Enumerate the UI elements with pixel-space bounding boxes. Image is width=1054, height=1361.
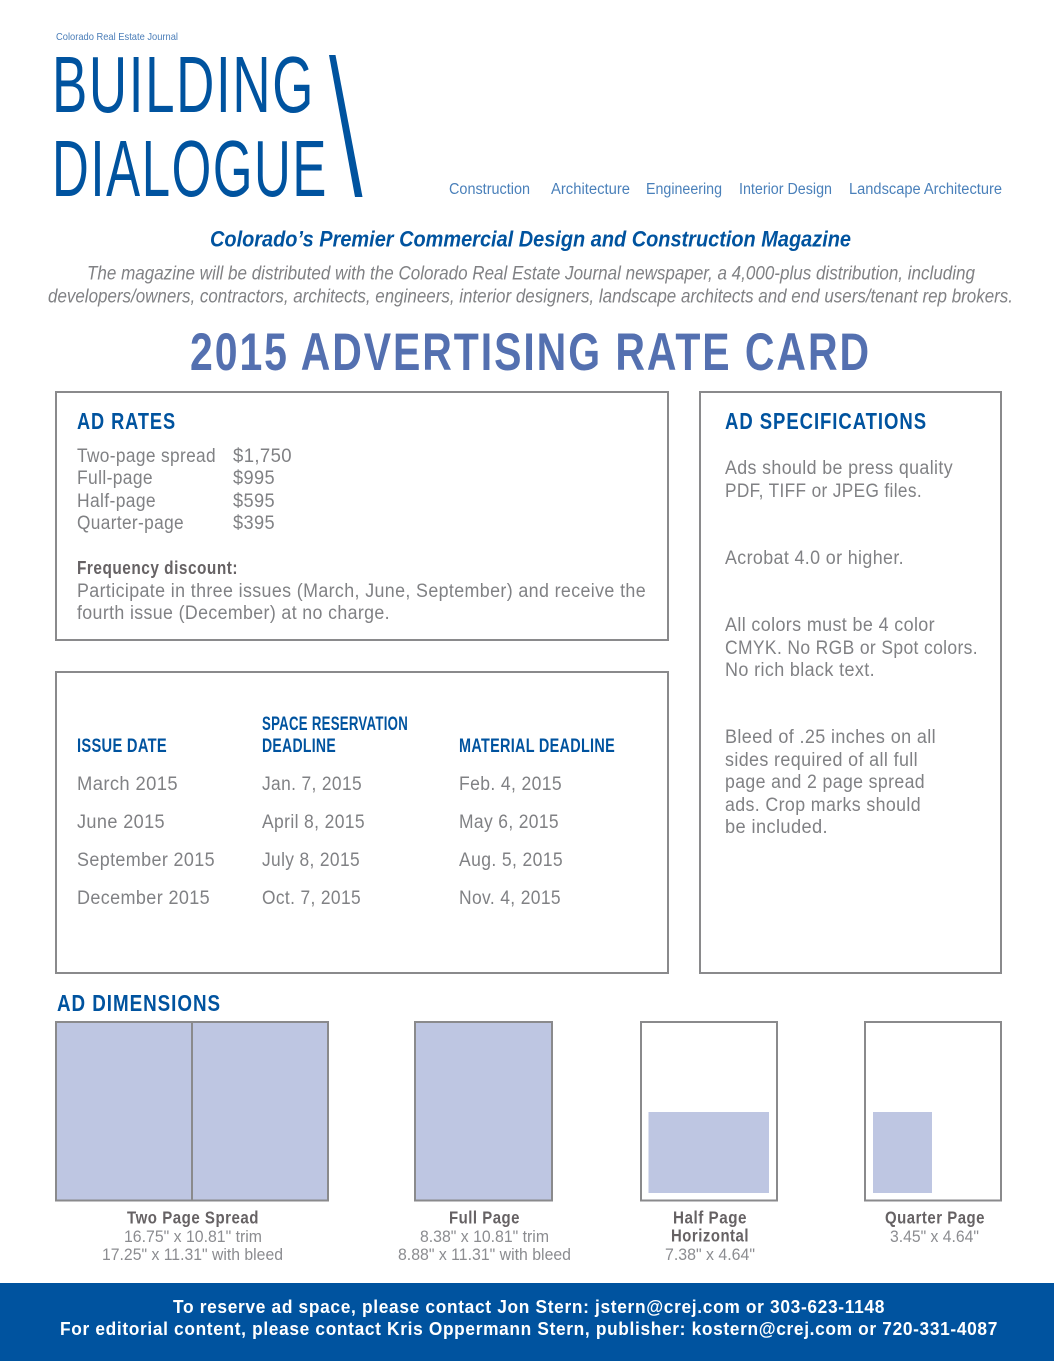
row: March: March 2015 (77, 774, 178, 795)
spec: file formats (725, 458, 953, 502)
rate list: Two-page spread (77, 446, 216, 467)
spec: colors: All colors must be 4 color (725, 615, 935, 636)
spec: colors: CMYK. No RGB or Spot colors. (725, 638, 978, 659)
spec: acrobat version: Acrobat 4.0 or higher. (725, 548, 904, 569)
diagram: quarter page (865, 1022, 1001, 1246)
category navigation: Architecture (551, 181, 630, 198)
frequency discount: Participate in three issues (March, June, September) and receive the (77, 581, 646, 602)
row: March: Jan. 7, 2015 (262, 774, 362, 795)
spec: bleed: be included. (725, 817, 828, 838)
ad rates heading: AD RATES (77, 408, 176, 434)
spec: colors (725, 615, 978, 681)
row: June (77, 812, 559, 833)
rate list (77, 446, 292, 534)
table headers: MATERIAL DEADLINE (459, 735, 615, 757)
panel: ad rates (56, 392, 668, 640)
spec: bleed: sides required of all full (725, 750, 918, 771)
diagram: half page horizontal: Horizontal (671, 1226, 749, 1246)
rate list: Full-page (77, 468, 153, 489)
row: September (77, 850, 563, 871)
spec: bleed: page and 2 page spread (725, 772, 925, 793)
spec: file formats: Ads should be press quality (725, 458, 953, 479)
row: March: Feb. 4, 2015 (459, 774, 562, 795)
rate list: $1,750 (233, 446, 292, 467)
category navigation (449, 181, 1002, 198)
panel: deadlines table (56, 672, 668, 973)
diagram: full page: 8.38" x 10.81" trim (420, 1228, 549, 1246)
row: September: Aug. 5, 2015 (459, 850, 563, 871)
category navigation: Engineering (646, 181, 722, 198)
footer contact band (0, 1283, 1054, 1361)
frequency discount: fourth issue (December) at no charge. (77, 603, 390, 624)
footer contact band: To reserve ad space, please contact Jon Stern: jstern@crej.com or 303-623-1148 (173, 1296, 885, 1317)
masthead (52, 31, 1002, 213)
rate list: $395 (233, 513, 275, 534)
rate list: Quarter-page (77, 513, 184, 534)
row: December: December 2015 (77, 888, 210, 909)
row: June: April 8, 2015 (262, 812, 365, 833)
spec: colors: No rich black text. (725, 660, 875, 681)
category navigation: Interior Design (739, 181, 832, 198)
row: June: June 2015 (77, 812, 165, 833)
logo: Building Dialogue (52, 40, 362, 213)
spec: bleed: Bleed of .25 inches on all (725, 727, 936, 748)
diagram: half page horizontal: 7.38" x 4.64" (665, 1246, 755, 1264)
diagram: quarter page: 3.45" x 4.64" (890, 1228, 979, 1246)
row: September: July 8, 2015 (262, 850, 360, 871)
diagram: quarter page: Quarter Page (885, 1208, 985, 1228)
diagram: half page horizontal (641, 1022, 777, 1264)
spec: file formats: PDF, TIFF or JPEG files. (725, 481, 922, 502)
diagram: full page: Full Page (449, 1208, 520, 1228)
logo: Building Dialogue: BUILDING (52, 40, 315, 129)
footer contact band: For editorial content, please contact Kris Oppermann Stern, publisher: kostern@crej.com or 720-331-4087 (60, 1318, 998, 1339)
specifications heading: AD SPECIFICATIONS (725, 408, 927, 434)
diagram: two page spread (56, 1022, 328, 1264)
tagline: Colorado’s Premier Commercial Design and Construction Magazine (210, 226, 851, 252)
table headers: ISSUE DATE (77, 735, 167, 757)
diagram: half page horizontal: Half Page (673, 1208, 747, 1228)
table headers: DEADLINE (262, 735, 336, 757)
frequency discount (77, 558, 646, 624)
logo: Building Dialogue: DIALOGUE (52, 124, 328, 213)
rate list: $995 (233, 468, 275, 489)
ad dimensions heading: AD DIMENSIONS (57, 990, 221, 1016)
row: June: May 6, 2015 (459, 812, 559, 833)
spec: bleed (725, 727, 936, 838)
publisher name: Colorado Real Estate Journal (56, 31, 178, 43)
spec: bleed: ads. Crop marks should (725, 795, 921, 816)
table headers (77, 713, 615, 757)
row: September: September 2015 (77, 850, 215, 871)
table headers: SPACE RESERVATION (262, 713, 408, 735)
diagram: full page: 8.88" x 11.31" with bleed (398, 1246, 571, 1264)
category navigation: Landscape Architecture (849, 181, 1002, 198)
row: March (77, 774, 562, 795)
intro paragraph: The magazine will be distributed with the Colorado Real Estate Journal newspaper, a 4,000-plus distribution, including (87, 264, 975, 284)
rate list: $595 (233, 491, 275, 512)
diagram: two page spread: 16.75" x 10.81" trim (124, 1228, 262, 1246)
main heading: 2015 ADVERTISING RATE CARD (190, 323, 871, 382)
rate list: Half-page (77, 491, 156, 512)
diagram: full page (398, 1022, 571, 1264)
frequency discount: Frequency discount: (77, 558, 238, 578)
intro paragraph (48, 264, 1013, 308)
diagram: two page spread: Two Page Spread (127, 1208, 259, 1228)
panel: ad specifications (700, 392, 1001, 973)
row: December (77, 888, 561, 909)
category navigation: Construction (449, 181, 530, 198)
row: December: Nov. 4, 2015 (459, 888, 561, 909)
diagram: two page spread: 17.25" x 11.31" with bleed (102, 1246, 283, 1264)
row: December: Oct. 7, 2015 (262, 888, 361, 909)
